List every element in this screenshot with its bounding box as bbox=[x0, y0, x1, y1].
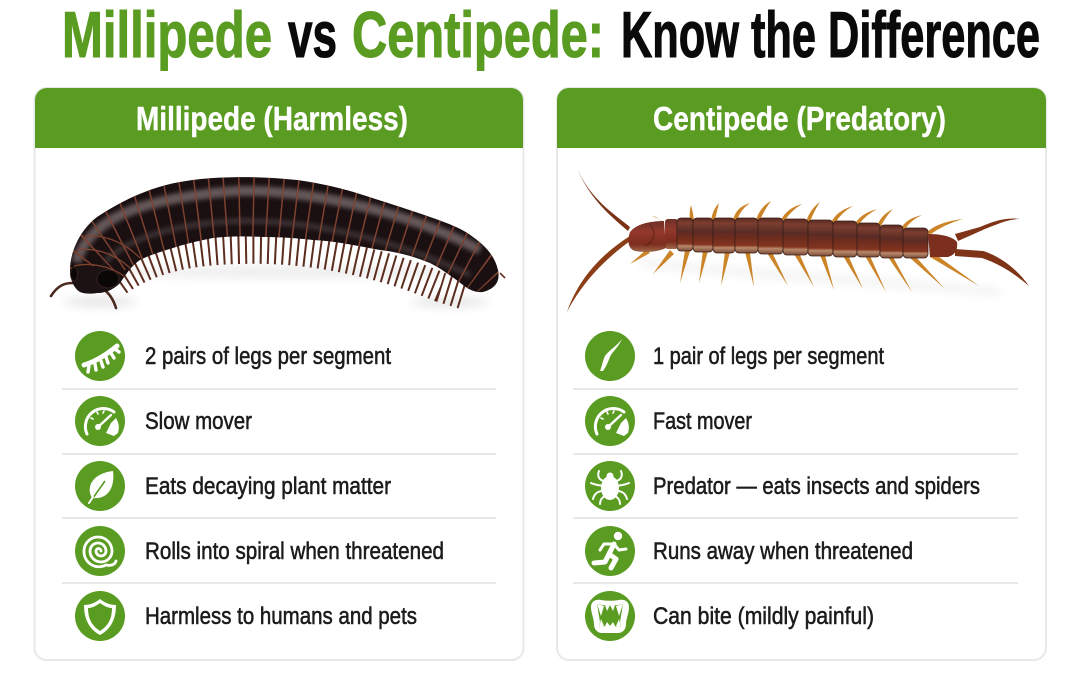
millipede illustration bbox=[51, 170, 510, 308]
icon: legs bbox=[75, 331, 125, 381]
centipede illustration bbox=[567, 168, 1029, 312]
row: bite bbox=[585, 591, 874, 641]
row: diet bbox=[75, 461, 391, 511]
icon: shield bbox=[75, 591, 125, 641]
row: legs: 2 pairs of legs per segment bbox=[145, 343, 391, 370]
row: diet: Predator — eats insects and spiders bbox=[653, 473, 980, 500]
icon: runner bbox=[585, 526, 635, 576]
row: defence: Rolls into spiral when threatened bbox=[145, 538, 444, 565]
icon: single leg bbox=[585, 331, 635, 381]
row: speed bbox=[585, 396, 752, 446]
icon: leaf bbox=[75, 461, 125, 511]
millipede head bbox=[70, 236, 140, 288]
row: bite: Can bite (mildly painful) bbox=[653, 603, 874, 630]
row: legs bbox=[75, 331, 391, 381]
millipede panel header: Millipede (Harmless) bbox=[136, 100, 408, 137]
row: defence: Runs away when threatened bbox=[653, 538, 913, 565]
row: diet: Eats decaying plant matter bbox=[145, 473, 391, 500]
row: speed bbox=[75, 396, 252, 446]
row: legs bbox=[585, 331, 884, 381]
centipede panel header bbox=[557, 88, 1046, 148]
row: safety: Harmless to humans and pets bbox=[145, 603, 417, 630]
centipede panel header: Centipede (Predatory) bbox=[653, 100, 946, 137]
panel: millipede bbox=[34, 88, 524, 660]
row: defence bbox=[585, 526, 913, 576]
icon: fangs bbox=[585, 591, 635, 641]
panel: centipede bbox=[557, 88, 1046, 660]
row: legs: 1 pair of legs per segment bbox=[653, 343, 884, 370]
row: defence bbox=[75, 526, 444, 576]
title: Millipede bbox=[62, 0, 272, 71]
icon: gauge bbox=[585, 396, 635, 446]
icon: spider bbox=[585, 461, 635, 511]
millipede panel header bbox=[35, 88, 523, 148]
row: diet bbox=[585, 461, 980, 511]
row: speed: Fast mover bbox=[653, 408, 752, 435]
title bbox=[62, 0, 1040, 71]
row: speed: Slow mover bbox=[145, 408, 252, 435]
title: vs bbox=[288, 0, 337, 71]
title: Centipede: bbox=[352, 0, 604, 71]
row: safety bbox=[75, 591, 417, 641]
icon: gauge bbox=[75, 396, 125, 446]
icon: spiral bbox=[75, 526, 125, 576]
